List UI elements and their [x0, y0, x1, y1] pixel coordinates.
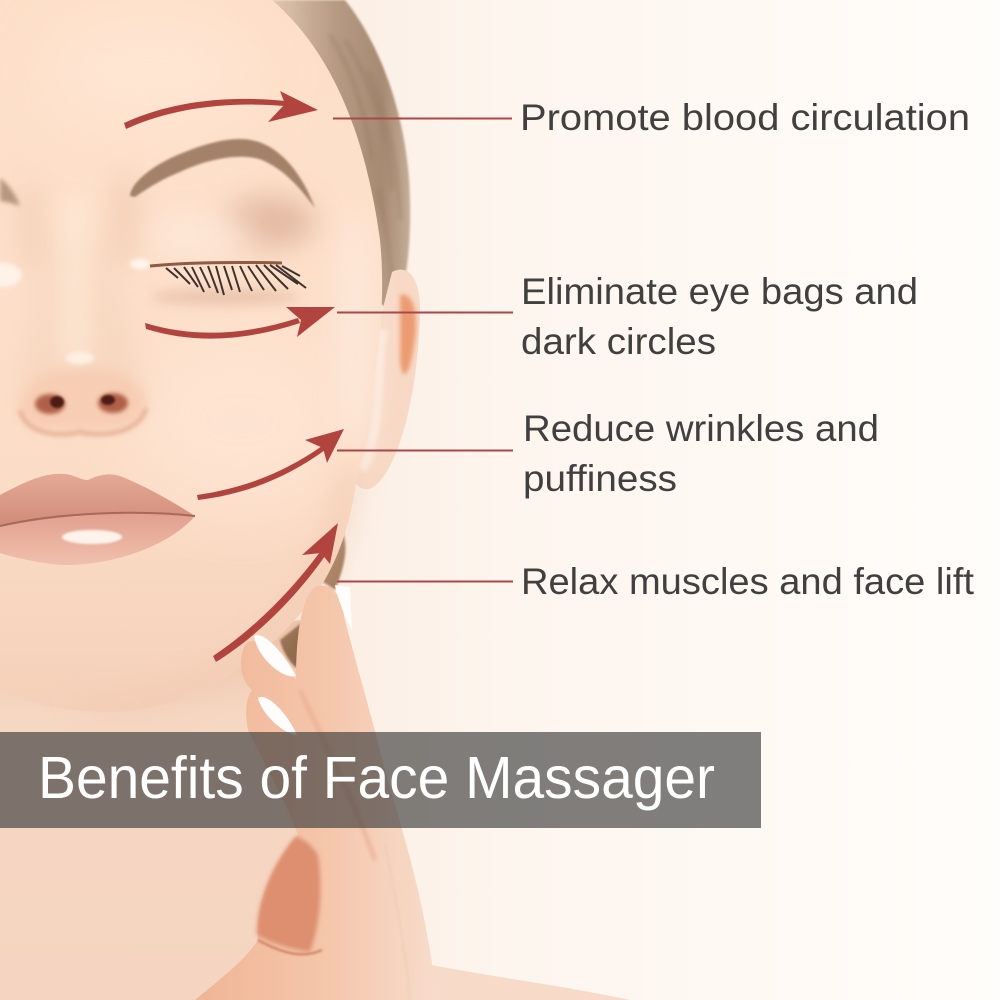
- label: eliminate eye bags and dark circles: [521, 271, 918, 362]
- hand: [195, 585, 437, 1000]
- title: Benefits of Face Massager: [38, 745, 715, 811]
- arrow: jaw: [213, 523, 338, 662]
- label: reduce wrinkles and puffiness: [523, 408, 879, 499]
- leader lines: [333, 118, 513, 582]
- jaw shadow: [60, 470, 358, 712]
- label: eliminate eye bags and dark circles: Eliminate eye bags and: [521, 271, 918, 312]
- label: reduce wrinkles and puffiness: puffiness: [523, 458, 677, 499]
- title banner: [0, 732, 761, 828]
- portrait illustration: [0, 0, 630, 1000]
- label: reduce wrinkles and puffiness: Reduce wrinkles and: [523, 408, 879, 449]
- lips: [0, 474, 195, 565]
- thumb web shadow: [257, 836, 320, 952]
- arrow: forehead: [124, 91, 318, 129]
- neck: [0, 620, 340, 1000]
- hair: [270, 0, 410, 312]
- eyebrow left: [0, 178, 20, 206]
- label: promote blood circulation: Promote blood circulation: [520, 97, 970, 138]
- nose: [18, 200, 148, 434]
- label: eliminate eye bags and dark circles: dark circles: [521, 321, 716, 362]
- eye socket shading: [224, 196, 316, 248]
- arrow: under eye: [145, 307, 335, 339]
- eyebrow right: [130, 139, 315, 208]
- eyelashes: [130, 259, 306, 295]
- arrow: cheek: [197, 429, 344, 500]
- shoulder: [430, 965, 630, 1000]
- ear: [349, 270, 420, 489]
- label: relax muscles and face lift: Relax muscles and face lift: [521, 561, 975, 602]
- face shape: [0, 0, 382, 712]
- fingernails: [254, 635, 296, 677]
- face highlights: [130, 330, 350, 510]
